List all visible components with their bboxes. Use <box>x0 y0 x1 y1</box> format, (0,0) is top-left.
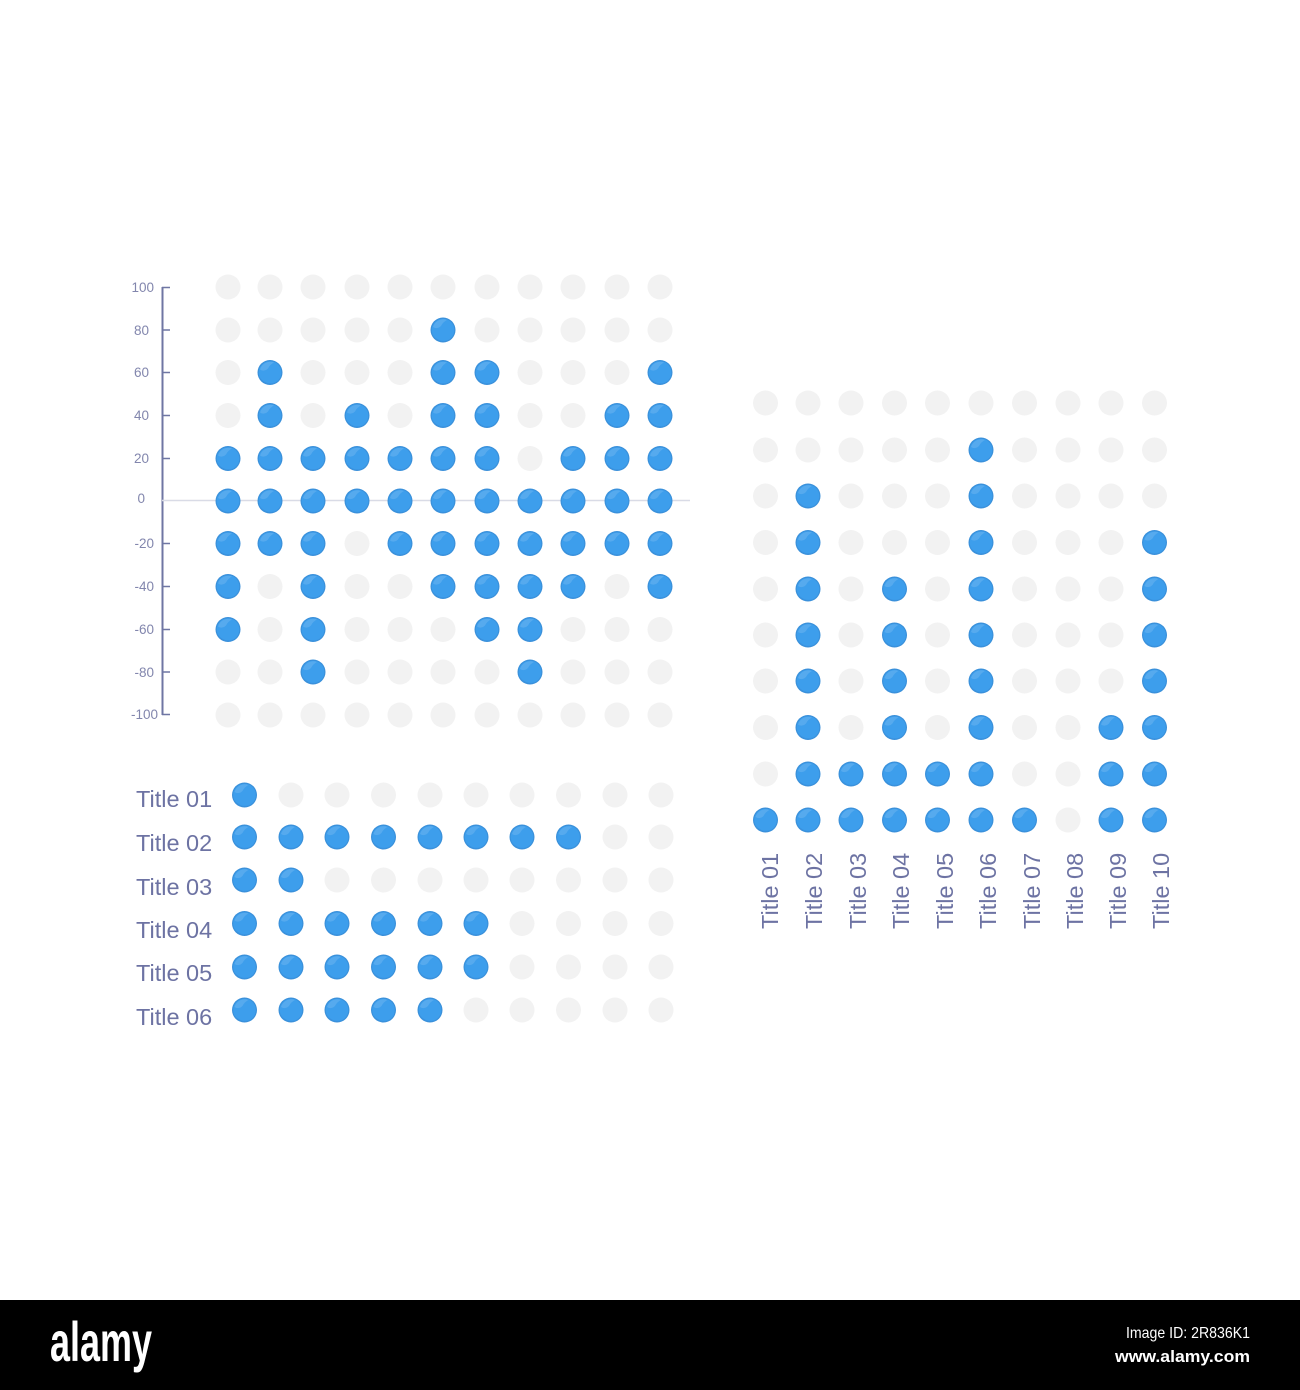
dots grid <box>216 274 672 728</box>
y axis <box>131 280 170 722</box>
row labels <box>136 786 212 1030</box>
footer logo: alamy <box>50 1310 152 1373</box>
website: www.alamy.com <box>1114 1347 1250 1366</box>
dots grid <box>753 390 1167 832</box>
dots grid <box>232 782 674 1022</box>
y axis: 40 <box>134 408 149 423</box>
y axis: -20 <box>134 536 154 551</box>
y axis: 80 <box>134 323 149 338</box>
footer bar <box>0 1300 1300 1390</box>
row labels: Title 01 <box>136 786 212 812</box>
row labels: Title 03 <box>136 874 212 900</box>
y axis: -40 <box>134 579 154 594</box>
row labels: Title 05 <box>136 960 212 986</box>
column labels: Title 06 <box>975 853 1001 929</box>
column labels: Title 05 <box>932 853 958 929</box>
column labels: Title 08 <box>1062 853 1088 929</box>
row labels: Title 06 <box>136 1004 212 1030</box>
column labels: Title 01 <box>757 853 783 929</box>
panel: horizontal dot chart <box>136 782 674 1030</box>
y axis: -80 <box>134 665 154 680</box>
y axis: 0 <box>137 491 145 506</box>
column labels <box>757 853 1174 929</box>
y axis: -60 <box>134 622 154 637</box>
column labels: Title 02 <box>801 853 827 929</box>
column labels: Title 03 <box>845 853 871 929</box>
column labels: Title 07 <box>1019 853 1045 929</box>
column labels: Title 10 <box>1148 853 1174 929</box>
panel: diverging dot chart <box>131 274 690 728</box>
column labels: Title 04 <box>888 853 914 929</box>
row labels: Title 02 <box>136 830 212 856</box>
column labels: Title 09 <box>1105 853 1131 929</box>
y axis: 60 <box>134 365 149 380</box>
y axis: 20 <box>134 451 149 466</box>
row labels: Title 04 <box>136 917 212 943</box>
image id: Image ID: 2R836K1 <box>1126 1325 1250 1342</box>
y axis: -100 <box>131 707 158 722</box>
panel: vertical dot chart <box>753 390 1174 929</box>
y axis: 100 <box>131 280 154 295</box>
